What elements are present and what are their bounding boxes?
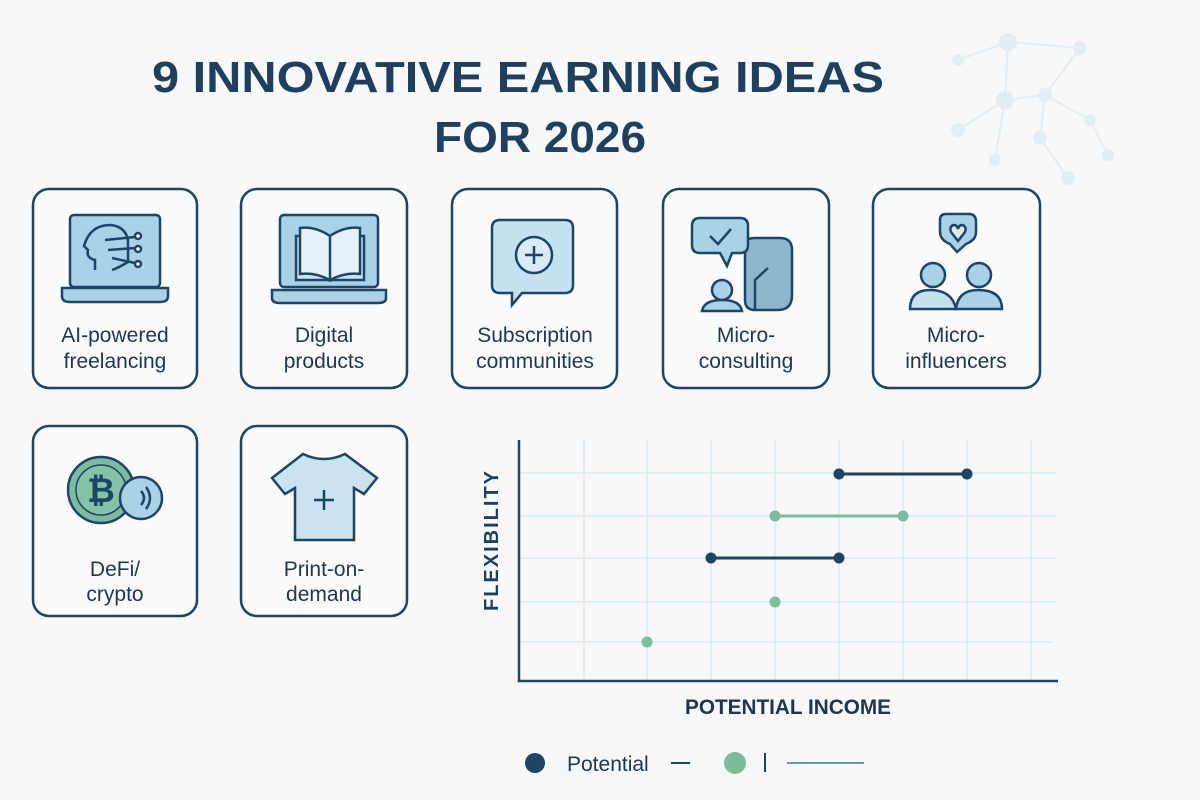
- card: Subscription communities: [452, 189, 617, 388]
- card: AI-powered freelancing: [33, 189, 197, 388]
- card: DeFi/crypto: crypto: [86, 583, 144, 606]
- card: Digital products: products: [284, 350, 364, 373]
- card: Micro-influencers: [873, 189, 1040, 388]
- decorative network top-right: [952, 34, 1113, 184]
- card: AI-powered freelancing: freelancing: [64, 350, 166, 373]
- title: [152, 53, 884, 162]
- card: Digital products: [241, 189, 407, 388]
- card: Print-on-demand: demand: [286, 583, 362, 606]
- label: Micro-: [927, 324, 985, 347]
- icon: two people heart: [910, 214, 1002, 309]
- chart: potential income vs flexibility: [481, 440, 1058, 719]
- card: Micro-influencers: influencers: [905, 350, 1007, 373]
- icon: laptop with book: [272, 215, 386, 303]
- icon: consultant: [692, 218, 792, 311]
- icon: crypto coins: [68, 457, 162, 523]
- label: Digital: [295, 324, 353, 347]
- axis labels: FLEXIBILITY: [481, 469, 503, 611]
- icon: laptop with AI head: [62, 215, 168, 302]
- label: Micro-: [717, 324, 775, 347]
- title: FOR 2026: [434, 113, 646, 162]
- label: DeFi/: [90, 558, 140, 581]
- legend: [525, 752, 864, 776]
- card: Micro-consulting: [663, 189, 829, 388]
- card: DeFi/crypto: [33, 426, 197, 616]
- icon: crypto coins: ₿: [87, 472, 115, 510]
- label: AI-powered: [61, 324, 169, 347]
- card: Subscription communities: communities: [476, 350, 594, 373]
- card: Print-on-demand: [241, 426, 407, 616]
- icon: speech bubble plus: [492, 220, 573, 305]
- chart: potential income vs flexibility: POTENTIAL INCOME: [685, 696, 891, 719]
- legend: Potential: [567, 753, 649, 776]
- label: Subscription: [477, 324, 593, 347]
- label: Print-on-: [284, 558, 364, 581]
- data: ranges: [642, 468, 972, 648]
- icon: t-shirt: [272, 454, 377, 540]
- card: Micro-consulting: consulting: [699, 350, 793, 373]
- title: 9 INNOVATIVE EARNING IDEAS: [152, 53, 884, 102]
